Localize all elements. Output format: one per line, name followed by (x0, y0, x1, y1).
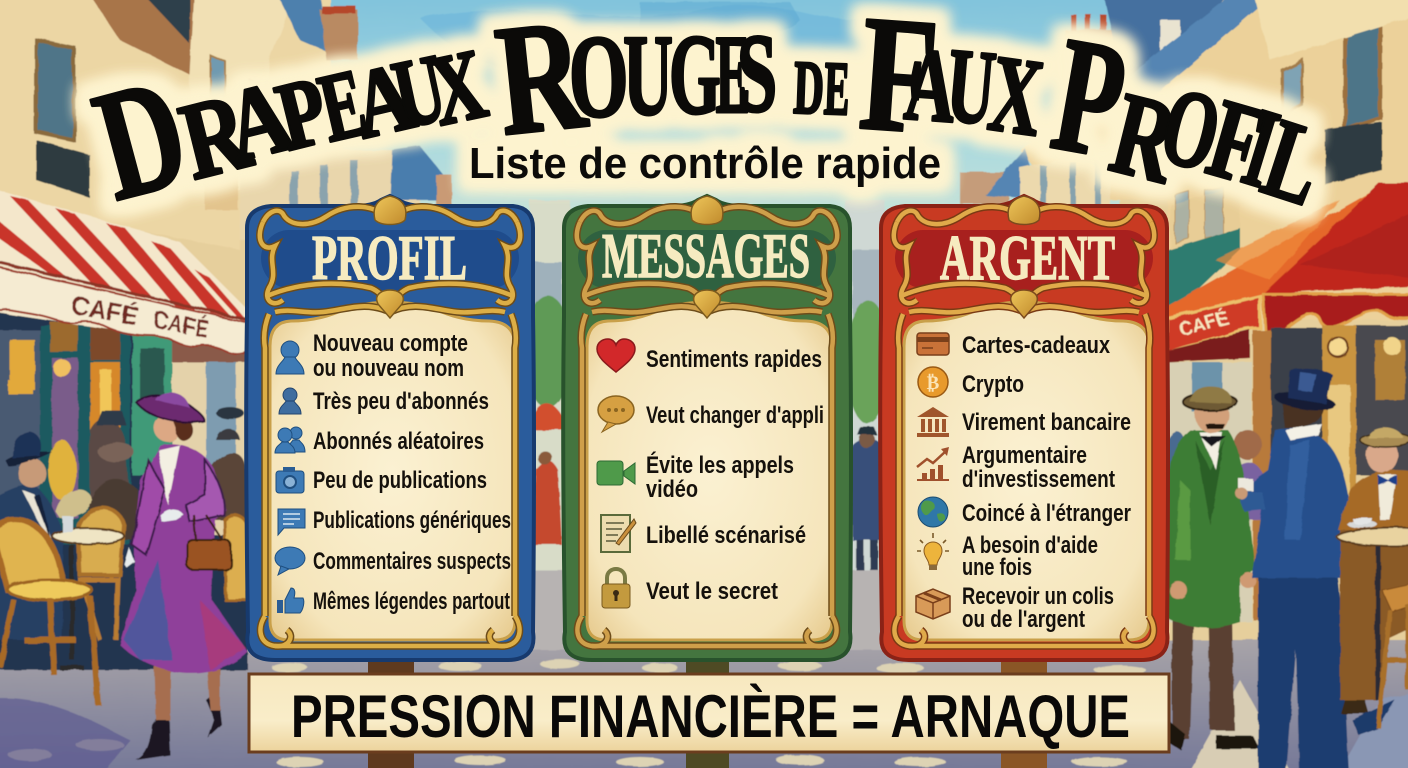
icon: speech bubble (275, 547, 305, 575)
main title: arched lettering: X (983, 32, 1050, 159)
subtitle: Liste de contrôle rapide (469, 139, 941, 188)
item: nouveau compte: ou nouveau nom (313, 355, 464, 382)
icon: gift card (917, 333, 949, 355)
man in green coat (1158, 387, 1260, 751)
main title: arched lettering: P (267, 55, 338, 171)
item: virement bancaire (917, 407, 1131, 437)
main title: arched lettering: X (421, 27, 495, 147)
item: veut changer d'appli: Veut changer d'appli (646, 402, 824, 429)
item: commentaires suspects (275, 547, 511, 575)
item: a besoin d'aide une fois: une fois (962, 554, 1032, 581)
central street behind the boards (524, 200, 890, 600)
bottom banner (249, 674, 1169, 752)
item: veut le secret (602, 569, 778, 608)
main title: arched lettering: E (310, 48, 376, 163)
panel: ARGENT (880, 196, 1168, 660)
left striped awning (0, 185, 248, 353)
item: argumentaire d'investissement: Argumentaire (962, 442, 1087, 469)
header plaque (578, 230, 836, 296)
item: sentiments rapides (597, 339, 822, 373)
main title: arched lettering: I (1231, 84, 1291, 211)
item: évite les appels vidéo (597, 451, 794, 503)
icon: person (276, 341, 304, 374)
seated man in top hat (0, 432, 64, 640)
seated man in straw hat (1338, 428, 1408, 735)
right cafe shopfront (1167, 325, 1408, 622)
board frame (246, 196, 534, 660)
main title: arched lettering: U (623, 11, 673, 139)
heading: PROFIL (312, 222, 467, 293)
main title: arched lettering: D (792, 46, 825, 131)
item: a besoin d'aide une fois (917, 532, 1098, 581)
panel: MESSAGES (563, 196, 851, 660)
icon: padlock (602, 569, 630, 608)
item: abonnés aléatoires: Abonnés aléatoires (313, 428, 484, 455)
right table and chair (1337, 518, 1408, 728)
main title: arched lettering: F (1196, 76, 1277, 209)
item: crypto (918, 367, 1024, 398)
item: peu de publications: Peu de publications (313, 467, 487, 494)
main title: arched lettering (79, 0, 1337, 234)
item: veut changer d'appli (598, 396, 824, 432)
item: cartes-cadeaux: Cartes-cadeaux (962, 332, 1111, 359)
cafe tables and wicker chairs (0, 490, 248, 705)
gold scrollwork (894, 196, 1154, 646)
icon: heart (597, 339, 635, 372)
item: très peu d'abonnés (279, 388, 489, 415)
main title: arched lettering: G (669, 11, 721, 139)
heading: ARGENT (940, 222, 1115, 293)
item: recevoir un colis ou de l'argent: Recevoir un colis (962, 583, 1114, 610)
item: argumentaire d'investissement (917, 442, 1115, 493)
icon: text bubble (278, 509, 305, 535)
main title: arched lettering: S (737, 13, 777, 136)
title halo and lettering (79, 0, 1337, 234)
icon: bitcoin coin: ₿ (927, 372, 940, 394)
man in blue suit and top hat (1235, 368, 1350, 768)
icon: globe (918, 497, 948, 527)
board frame (563, 196, 851, 660)
item: coincé à l'étranger: Coincé à l'étranger (962, 500, 1131, 527)
header plaque (895, 230, 1153, 296)
awning lettering: CAFÉ (1177, 307, 1231, 341)
sign posts (368, 650, 1047, 768)
item: mêmes légendes partout: Mêmes légendes partout (313, 588, 510, 615)
item: libellé scénarisé: Libellé scénarisé (646, 522, 806, 549)
main title: arched lettering: R (1100, 68, 1190, 209)
item: argumentaire d'investissement: d'investissement (962, 466, 1115, 493)
item: abonnés aléatoires (275, 427, 484, 455)
item: sentiments rapides: Sentiments rapides (646, 346, 822, 373)
item: a besoin d'aide une fois: A besoin d'aide (962, 532, 1098, 559)
main title: arched lettering: D (79, 43, 204, 234)
icon: parcel (916, 589, 950, 619)
item: évite les appels vidéo: Évite les appels (646, 451, 794, 479)
main title: arched lettering: R (169, 69, 262, 203)
board frame (880, 196, 1168, 660)
main title: arched lettering: U (942, 27, 1000, 148)
item: nouveau compte: Nouveau compte (313, 330, 468, 357)
icon: thumbs up (277, 588, 304, 613)
item: crypto: Crypto (962, 371, 1024, 398)
awning lettering: CAFÉ (69, 289, 141, 332)
heading: MESSAGES (602, 220, 810, 291)
gold scrollwork (577, 196, 837, 646)
icon: light bulb (917, 533, 949, 570)
main title: arched lettering: A (344, 43, 424, 160)
panel: PROFIL (246, 196, 534, 660)
main title: arched lettering: A (901, 27, 960, 145)
item: évite les appels vidéo: vidéo (646, 476, 698, 503)
icon: bank (917, 407, 949, 437)
main title: arched lettering: U (384, 34, 455, 150)
main title: arched lettering: E (823, 45, 851, 131)
sky (300, 0, 1120, 260)
item: recevoir un colis ou de l'argent (916, 583, 1114, 633)
main title: arched lettering: O (1150, 63, 1232, 195)
item: nouveau compte (276, 330, 468, 382)
right red awning (1167, 183, 1408, 362)
item: mêmes légendes partout (277, 588, 510, 615)
left striped awning: CAFÉ (151, 305, 211, 344)
item: veut le secret: Veut le secret (646, 578, 778, 605)
parchment (270, 302, 515, 640)
icon: video camera (597, 461, 635, 485)
item: publications génériques: Publications génériques (313, 507, 511, 534)
item: cartes-cadeaux (917, 332, 1111, 359)
main title: arched lettering: E (715, 12, 751, 136)
icon: rising chart (917, 447, 949, 481)
item: très peu d'abonnés: Très peu d'abonnés (313, 388, 489, 415)
gold scrollwork (260, 196, 520, 646)
icon: script and pencil (601, 515, 636, 552)
item: virement bancaire: Virement bancaire (962, 409, 1131, 436)
item: recevoir un colis ou de l'argent: ou de l'argent (962, 606, 1085, 633)
parchment (587, 302, 832, 640)
cobblestone ground (0, 570, 1408, 768)
right buildings (960, 0, 1408, 320)
item: coincé à l'étranger (918, 497, 1131, 527)
left cafe shopfront (0, 310, 248, 670)
main title: arched lettering: L (1250, 94, 1337, 229)
main title: arched lettering: O (567, 9, 631, 143)
item: peu de publications (276, 467, 487, 494)
icon: chat bubble (598, 396, 634, 432)
woman in purple dress (120, 392, 248, 760)
icon: small person (279, 388, 301, 414)
header plaque (261, 230, 519, 296)
parchment (904, 302, 1149, 640)
item: publications génériques (278, 507, 511, 535)
banner text: PRESSION FINANCIÈRE = ARNAQUE (291, 683, 1130, 750)
main title: arched lettering: A (215, 60, 303, 184)
item: commentaires suspects: Commentaires suspects (313, 548, 511, 575)
item: libellé scénarisé (601, 515, 806, 552)
icon: two people (275, 427, 305, 453)
main title: arched lettering: P (1041, 3, 1138, 194)
left buildings (0, 0, 452, 250)
icon: camera (276, 467, 304, 493)
